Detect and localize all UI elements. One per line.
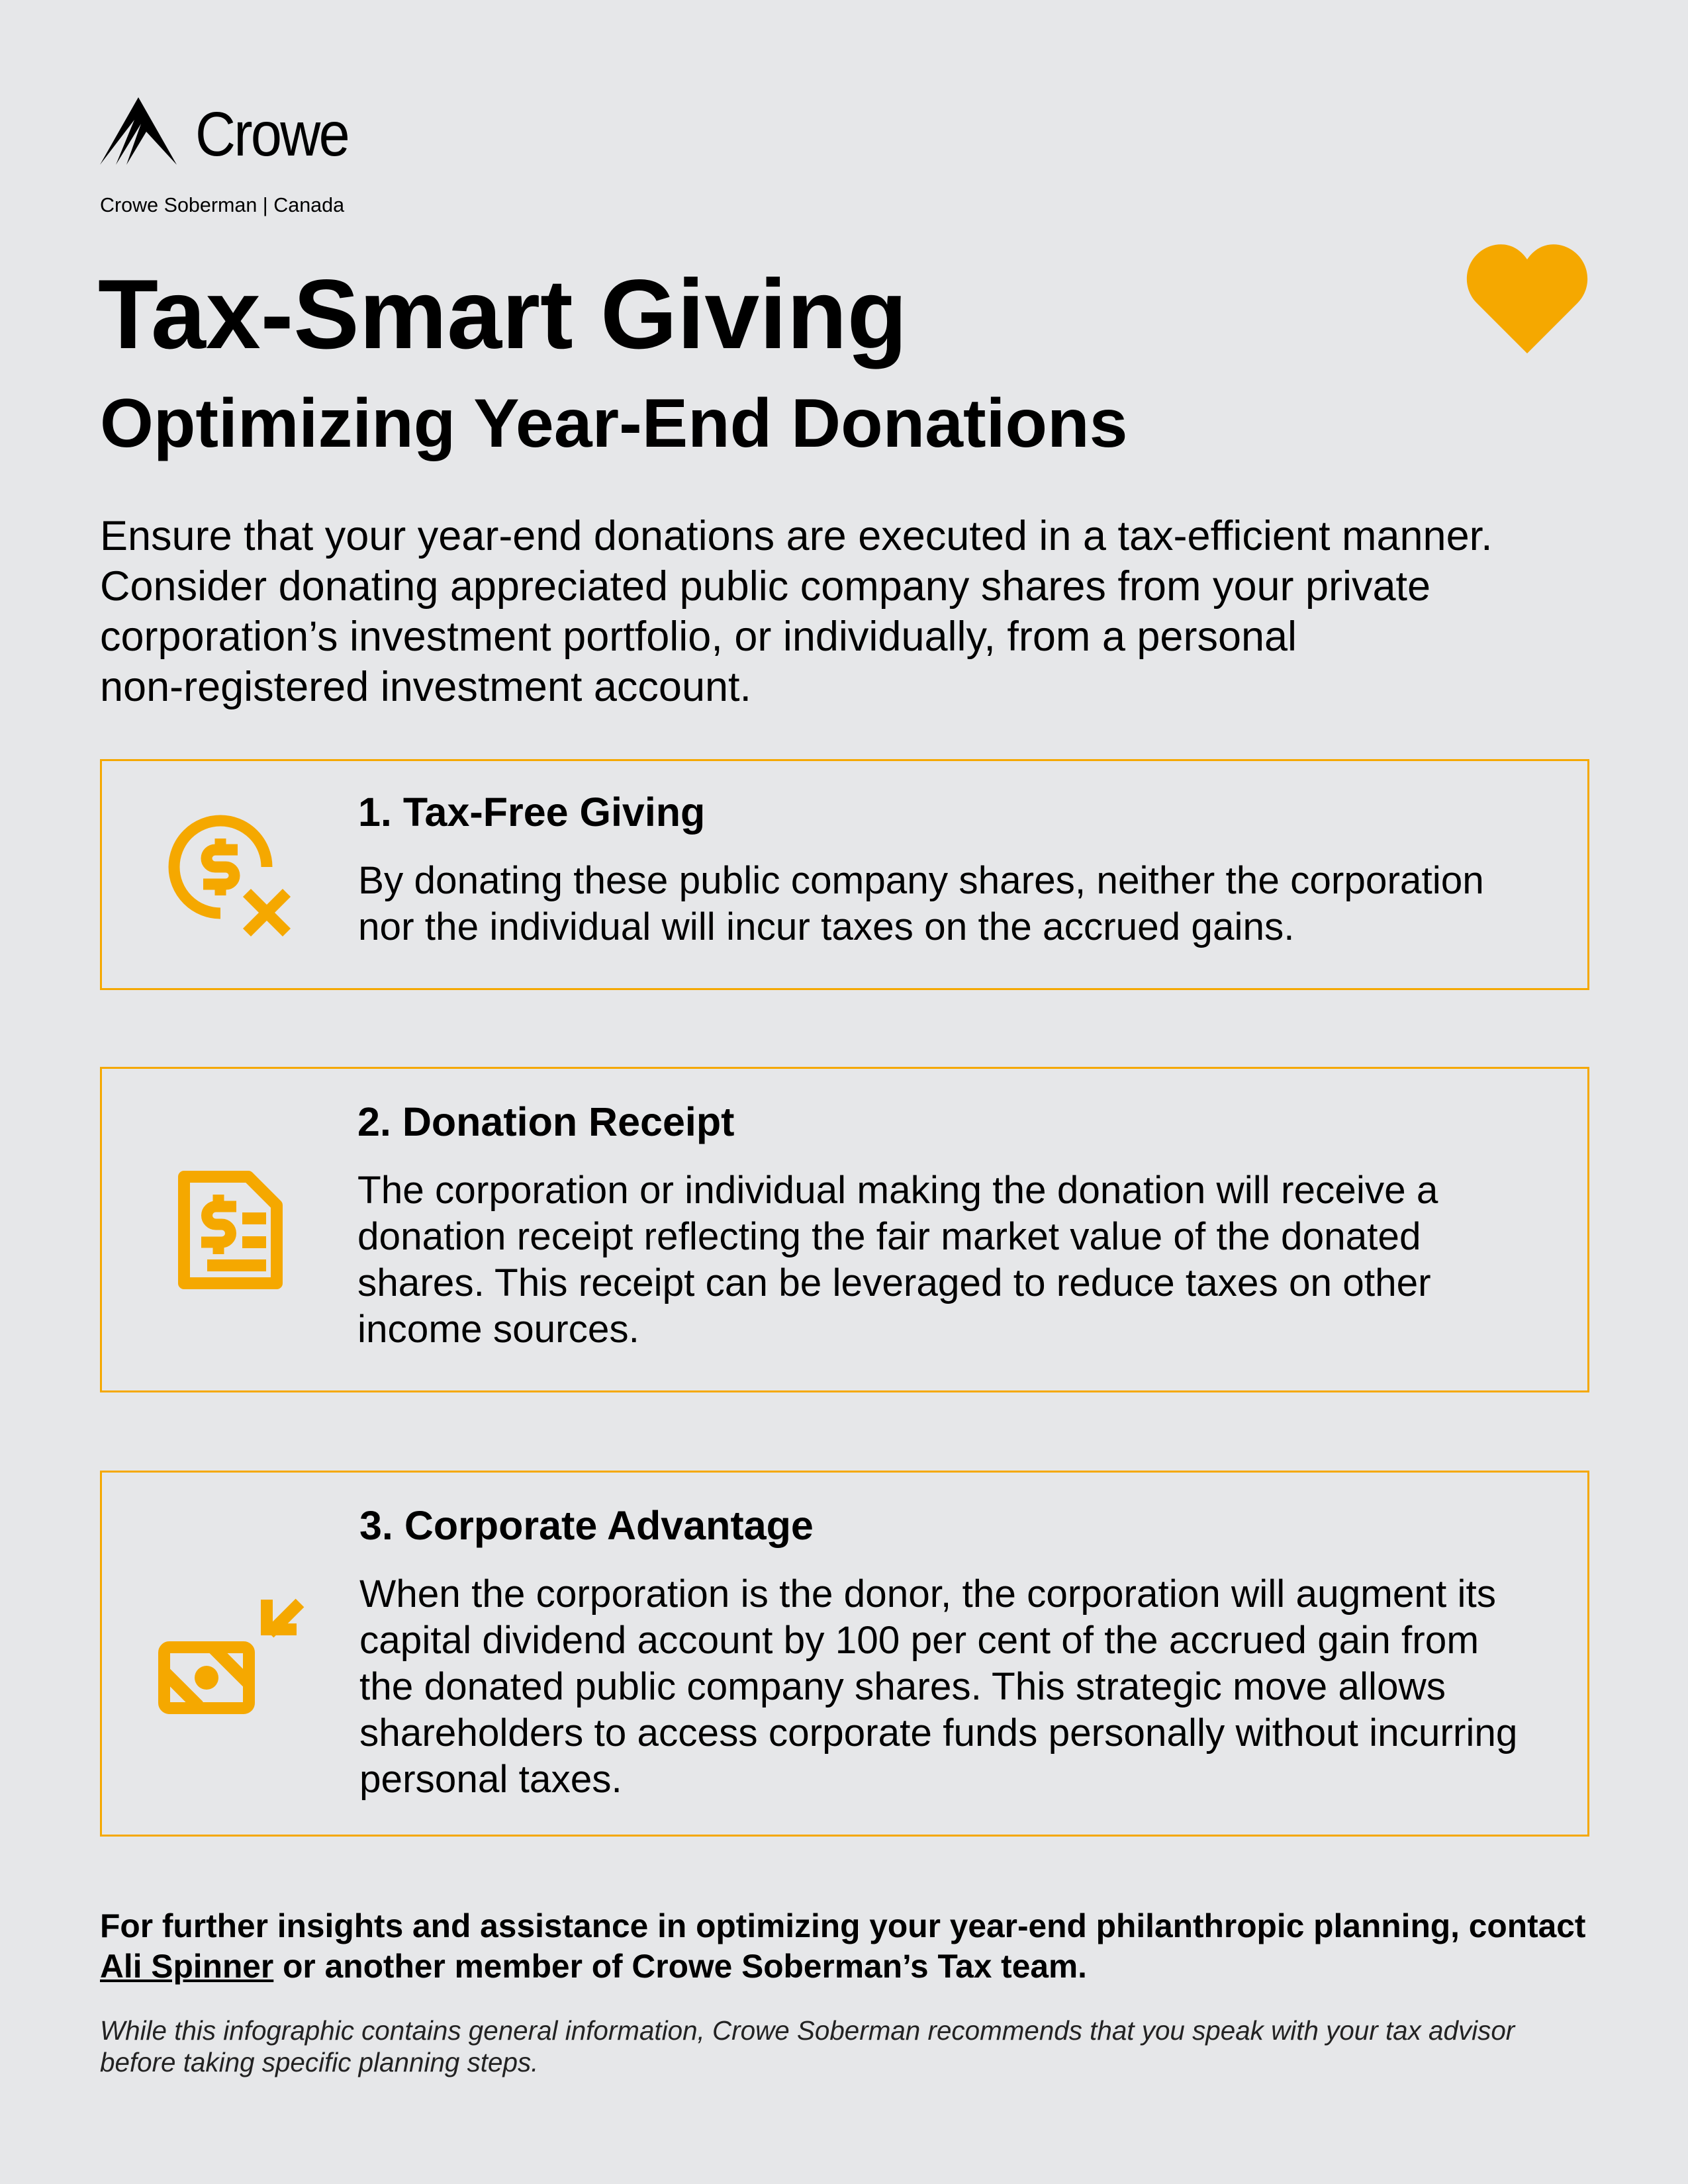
panel: corporate advantage	[100, 1471, 1589, 1837]
disclaimer: While this infographic contains general information, Crowe Soberman recommends that you speak with your tax advisor	[100, 2015, 1515, 2046]
icon: crowe mark	[100, 97, 177, 165]
text 3: capital dividend account by 100 per cent of the accrued gain from	[359, 1619, 1479, 1662]
heading 1: 1. Tax-Free Giving	[358, 790, 705, 835]
text 1: nor the individual will incur taxes on the accrued gains.	[358, 905, 1295, 948]
intro paragraph: corporation’s investment portfolio, or individually, from a personal	[100, 614, 1297, 660]
text 2	[357, 1169, 1438, 1351]
disclaimer: before taking specific planning steps.	[100, 2047, 538, 2077]
icon: dollar circle with x	[168, 815, 291, 936]
heading 2: 2. Donation Receipt	[357, 1099, 734, 1144]
text 2: donation receipt reflecting the fair market value of the donated	[357, 1215, 1421, 1258]
text 2: The corporation or individual making the donation will receive a	[357, 1169, 1438, 1212]
panel: tax-free giving	[100, 759, 1589, 990]
icon: receipt	[178, 1171, 283, 1289]
disclaimer	[100, 2015, 1516, 2077]
text 3: shareholders to access corporate funds personally without incurring	[359, 1711, 1517, 1754]
text 2: shares. This receipt can be leveraged to reduce taxes on other	[357, 1261, 1431, 1304]
intro paragraph	[100, 513, 1493, 710]
footer call to action: For further insights and assistance in optimizing your year-end philanthropic planning, contact	[100, 1907, 1585, 1944]
text 2: income sources.	[357, 1308, 639, 1351]
text 1	[358, 859, 1484, 948]
subtitle: Optimizing Year-End Donations	[100, 385, 1127, 462]
text 3: personal taxes.	[359, 1758, 622, 1801]
text 3: When the corporation is the donor, the corporation will augment its	[359, 1572, 1496, 1615]
logo	[100, 97, 348, 216]
footer call to action: Ali Spinner or another member of Crowe Soberman’s Tax team.	[100, 1948, 1087, 1985]
title: Tax-Smart Giving	[98, 259, 908, 369]
intro paragraph: Ensure that your year-end donations are executed in a tax-efficient manner.	[100, 513, 1493, 559]
icon: cash with arrow	[158, 1599, 305, 1714]
text 3: the donated public company shares. This strategic move allows	[359, 1665, 1446, 1708]
intro paragraph: Consider donating appreciated public company shares from your private	[100, 563, 1430, 610]
footer call to action	[100, 1907, 1585, 1985]
logo subtitle: Crowe Soberman | Canada	[100, 194, 344, 216]
text 1: By donating these public company shares, neither the corporation	[358, 859, 1484, 902]
intro paragraph: non-registered investment account.	[100, 664, 751, 710]
text 3	[359, 1572, 1517, 1801]
icon: heart	[1467, 244, 1587, 353]
heading 3: 3. Corporate Advantage	[359, 1503, 814, 1548]
panel: donation receipt	[100, 1067, 1589, 1392]
logo word: Crowe	[195, 99, 348, 169]
